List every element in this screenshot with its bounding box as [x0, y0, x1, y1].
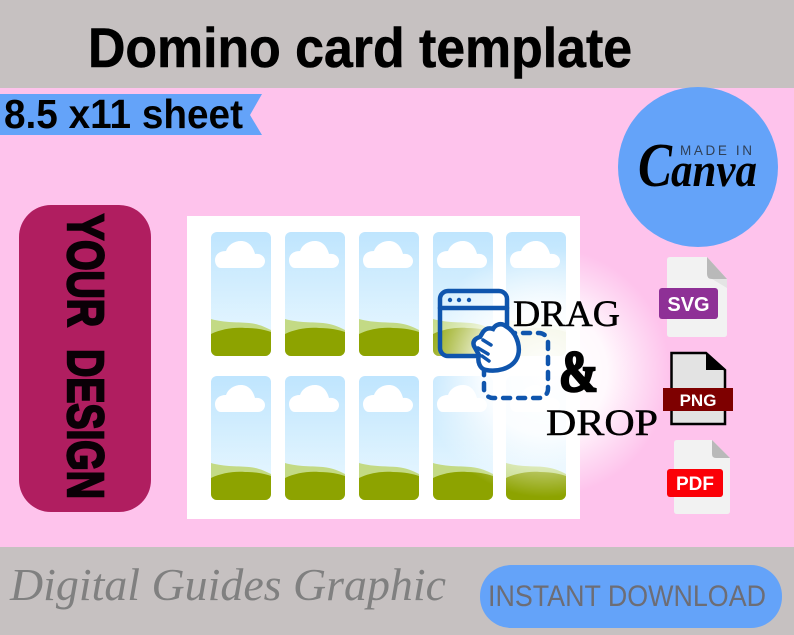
- title: Domino card template: [88, 16, 632, 79]
- icon: png file: PNG: [680, 391, 716, 410]
- panel: your design card: DESIGN: [57, 349, 114, 499]
- panel: template sheet: [187, 216, 580, 519]
- button: instant download: [480, 565, 782, 628]
- icon: drag and drop: [440, 291, 548, 398]
- icon: pdf file: PDF: [676, 474, 714, 495]
- text: ampersand: &: [559, 339, 598, 404]
- text: drop: DROP: [546, 403, 658, 444]
- card row 2: [211, 376, 566, 500]
- icon: svg file: SVG: [667, 294, 710, 316]
- badge: made in canva: [618, 87, 778, 247]
- badge: made in canva: anva: [671, 144, 757, 197]
- badge: made in canva: MADE IN: [680, 143, 752, 158]
- button: instant download: INSTANT DOWNLOAD: [488, 580, 766, 613]
- ribbon: sheet size: 8.5 x11 sheet: [4, 91, 243, 137]
- bottom footer band: [0, 547, 794, 635]
- badge: made in canva: C: [638, 132, 673, 200]
- text: drag: DRAG: [513, 294, 620, 335]
- icon: pdf file: [667, 440, 730, 514]
- text: brand signature: Digital Guides Graphic: [9, 559, 446, 610]
- top header band: [0, 0, 794, 88]
- card row 1: [211, 232, 566, 356]
- white glow: [420, 247, 670, 497]
- panel: your design card: [19, 205, 151, 512]
- icon: png file: [663, 352, 733, 424]
- icon: svg file: [659, 257, 727, 337]
- panel: your design card: YOUR: [57, 214, 114, 327]
